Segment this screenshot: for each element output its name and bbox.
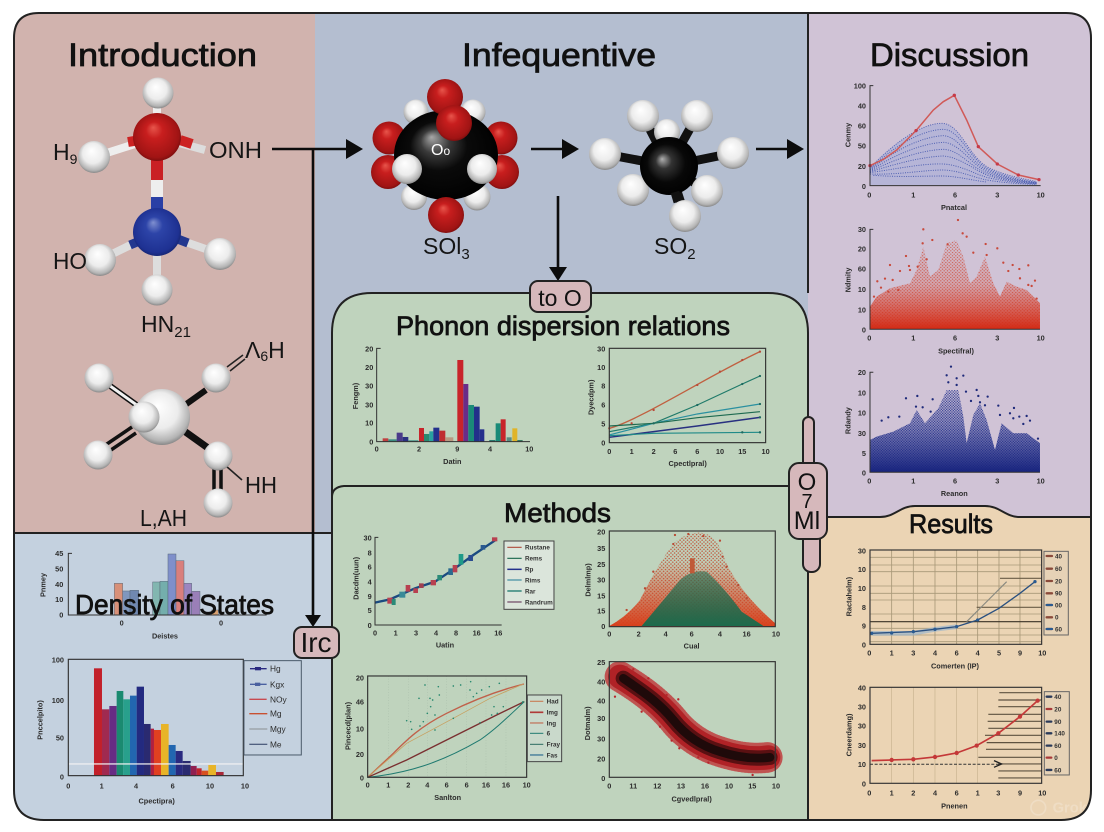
chart: methods line with legend: 6 (368, 563, 372, 572)
molecule labels: introduction: ONH (209, 137, 262, 163)
chart: small density histogram: 0 (120, 619, 124, 628)
legend: spectrum: Mgy (270, 724, 287, 734)
legend: results top: 0 (1055, 615, 1059, 622)
chart: density line with blue dotted curves: Pnatcal (941, 203, 967, 212)
chart: phonon bars: 4 (488, 444, 493, 453)
legend: results bottom: 140 (1054, 731, 1065, 738)
chart: small density histogram: 45 (55, 549, 63, 558)
molecule labels: introduction: 6 (260, 348, 268, 364)
chart: red growth curve: 2 (911, 788, 915, 797)
chart: red scatter intensity: 60 (858, 265, 866, 274)
legend: results top: 60 (1055, 566, 1062, 573)
molecule: white ball and stick (84, 355, 245, 518)
chart: methods line with legend: 5 (368, 606, 372, 615)
legend: methods multi-line: Fas (547, 752, 558, 759)
chart: methods red and green mound: Cual (684, 641, 700, 650)
legend: results bottom: 40 (1054, 694, 1062, 701)
chart: red scatter intensity (844, 220, 1045, 355)
chart: blue scatter intensity: 20 (858, 368, 866, 377)
chart: methods red and green mound: Delmlmp) (584, 563, 593, 597)
chart: conversion curve with grid: 10 (858, 565, 866, 574)
chart: red growth curve: 1 (976, 788, 980, 797)
chart: density line with blue dotted curves: 10 (1037, 190, 1045, 199)
chart: phonon lines: 5 (601, 420, 605, 429)
chart: small density histogram: 40 (55, 580, 63, 589)
chart: methods multi-line with scatter: 1 (386, 781, 390, 790)
chart: blue scatter intensity (844, 367, 1045, 498)
connector badge: O 7 Ml: Ml (794, 507, 820, 535)
chart: red growth curve: 1 (890, 788, 894, 797)
legend: methods line: Randrum (525, 599, 553, 606)
legend: results top: 40 (1055, 553, 1062, 560)
chart: blue scatter intensity: 10 (1037, 476, 1045, 485)
chart: phonon lines: 10 (716, 447, 724, 456)
heading: phonon dispersion relations: Phonon dispersion relations (396, 311, 730, 341)
arrow: SOI3 to SO2 (531, 139, 579, 159)
chart: blue scatter intensity: 3 (995, 476, 999, 485)
legend: results bottom: 60 (1054, 767, 1062, 774)
chart: phonon lines: Cpectlpral) (668, 459, 707, 468)
chart: blue scatter intensity: 6 (953, 476, 957, 485)
molecule labels: introduction (53, 137, 285, 531)
chart: methods red and green mound: 15 (597, 591, 605, 600)
chart: blue scatter intensity: 10 (858, 408, 866, 417)
chart: phonon bars (351, 344, 533, 466)
chart: methods dark red band: 13 (677, 782, 685, 791)
chart: phonon lines: 10 (762, 447, 770, 456)
molecule: SO2 black centre (589, 100, 749, 232)
legend: spectrum (244, 661, 301, 755)
chart: red growth curve: 6 (955, 788, 959, 797)
heading: results: Results (909, 509, 993, 539)
chart: red scatter intensity: 10 (858, 305, 866, 314)
chart: conversion curve with grid: 9 (862, 622, 866, 631)
chart: methods line with legend (351, 533, 554, 650)
watermark: Grok (1053, 801, 1088, 817)
chart: methods line with legend: Dacdm(uun) (351, 556, 360, 600)
chart: conversion curve with grid: 6 (955, 648, 959, 657)
chart: phonon lines: 30 (597, 344, 605, 353)
chart: methods multi-line with scatter: 6 (465, 781, 469, 790)
legend: results bottom: 0 (1054, 755, 1058, 762)
molecule labels: introduction: H (268, 337, 285, 363)
chart: methods dark red band: Cgvedlpral) (671, 795, 712, 804)
chart: methods dark red band: 30 (597, 714, 605, 723)
chart: coloured spectrum histogram: 50 (56, 734, 64, 743)
chart: blue scatter intensity: 10 (858, 388, 866, 397)
chart: phonon lines: 0 (601, 439, 605, 448)
chart: methods dark red band: 10 (725, 782, 733, 791)
chart: phonon lines: 2 (652, 447, 656, 456)
chart: methods red and green mound: 6 (690, 629, 694, 638)
legend: methods line: Rustane (525, 545, 550, 552)
chart: phonon lines: 1 (630, 447, 634, 456)
chart: coloured spectrum histogram: 10 (241, 782, 249, 791)
chart: methods dark red band: 15 (748, 782, 756, 791)
chart: phonon bars: 30 (365, 400, 373, 409)
chart: phonon lines: 15 (738, 447, 746, 456)
chart: small density histogram: 10 (55, 595, 63, 604)
chart: red scatter intensity: 30 (858, 225, 866, 234)
chart: methods multi-line with scatter: 10 (356, 724, 364, 733)
legend: results top: 20 (1055, 578, 1062, 585)
chart: blue scatter intensity: 0 (867, 476, 871, 485)
chart: small density histogram (38, 549, 267, 641)
molecule labels: introduction: L,AH (140, 505, 187, 531)
chart: phonon lines: 10 (597, 363, 605, 372)
molecule: SOI3 cluster (371, 79, 519, 233)
chart: phonon bars: 10 (365, 419, 373, 428)
chart: red growth curve: 30 (858, 722, 866, 731)
panel: results (808, 506, 1091, 820)
label: SO2: 2 (687, 246, 696, 263)
chart: methods line with legend: 0 (373, 628, 377, 637)
chart: methods multi-line with scatter: 20 (356, 750, 364, 759)
chart: phonon bars: 20 (365, 363, 373, 372)
legend: results bottom: 20 (1054, 706, 1062, 713)
chart: red scatter intensity: 10 (1037, 334, 1045, 343)
chart: small density histogram: 0 (59, 611, 63, 620)
legend: spectrum: Kgx (270, 679, 285, 689)
connector badge: O 7 Ml: 7 (801, 491, 813, 513)
chart: coloured spectrum histogram: 100 (52, 696, 64, 705)
chart: phonon bars: 0 (369, 438, 373, 447)
chart: methods red and green mound: 0 (607, 629, 611, 638)
chart: conversion curve with grid: 10 (858, 584, 866, 593)
legend: methods line (504, 541, 554, 609)
chart: methods line with legend: 9 (368, 592, 372, 601)
chart: methods multi-line with scatter: Sanlton (434, 793, 462, 802)
panel: phonon dispersion relations (331, 292, 809, 496)
chart: methods dark red band (583, 658, 780, 804)
chart: phonon bars: 0 (375, 444, 379, 453)
heading: introduction: Introduction (68, 37, 257, 73)
chart: methods multi-line with scatter: 16 (502, 781, 510, 790)
chart: density line with blue dotted curves: 60 (858, 121, 866, 130)
chart: conversion curve with grid: Ractahelm) (844, 576, 853, 616)
chart: methods dark red band: 0 (607, 782, 611, 791)
chart: red scatter intensity: 0 (867, 334, 871, 343)
connector badge: O 7 Ml: O (798, 469, 816, 496)
molecule: red and blue ball and stick (78, 78, 236, 306)
chart: red growth curve: Cneerdamg) (844, 713, 853, 756)
chart: methods line with legend: 3 (414, 628, 418, 637)
chart: red growth curve: 9 (1018, 788, 1022, 797)
watermark (1031, 800, 1088, 817)
legend: methods multi-line: 6 (547, 731, 551, 738)
chart: red scatter intensity: 3 (995, 334, 999, 343)
chart: phonon lines: 0 (607, 447, 611, 456)
chart: red growth curve: 40 (858, 684, 866, 693)
chart: density line with blue dotted curves: 20 (858, 162, 866, 171)
molecule labels: introduction: HN (141, 311, 174, 337)
chart: conversion curve with grid: 8 (862, 603, 866, 612)
chart: methods red and green mound (584, 527, 780, 650)
chart: small density histogram: 0 (219, 619, 223, 628)
chart: coloured spectrum histogram (36, 656, 301, 805)
legend: methods multi-line: Had (547, 699, 559, 706)
chart: methods red and green mound: 35 (597, 544, 605, 553)
badge: Irc (294, 627, 339, 658)
chart: phonon bars: 10 (525, 444, 533, 453)
arrow: SO2 to discussion (756, 139, 804, 159)
chart: methods dark red band: 11 (629, 782, 637, 791)
chart: blue scatter intensity: Rdandy (844, 406, 853, 434)
chart: methods red and green mound: 0 (601, 622, 605, 631)
molecule labels: introduction: HH (245, 472, 277, 498)
chart: red scatter intensity: 10 (858, 285, 866, 294)
heading: methods: Methods (504, 498, 611, 528)
chart: methods multi-line with scatter: 0 (360, 774, 364, 783)
chart: conversion curve with grid: 0 (867, 648, 871, 657)
chart: density line with blue dotted curves: 0 (867, 190, 871, 199)
chart: phonon lines: 6 (695, 447, 699, 456)
arrow: introduction to infequentive with branch down (272, 139, 363, 627)
chart: conversion curve with grid: 1 (890, 648, 894, 657)
chart: methods line with legend: 8 (454, 628, 458, 637)
chart: methods red and green mound: 10 (772, 629, 780, 638)
legend: results bottom: 60 (1054, 743, 1062, 750)
chart: red scatter intensity: Spectifral) (938, 346, 974, 355)
chart: methods line with legend: 4 (434, 628, 439, 637)
chart: conversion curve with grid: 4 (976, 648, 981, 657)
chart: methods multi-line with scatter: 6 (445, 781, 449, 790)
molecule labels: introduction: 9 (70, 151, 78, 167)
legend: results top: 60 (1055, 626, 1062, 633)
chart: conversion curve with grid: 30 (858, 546, 866, 555)
chart: methods dark red band: 40 (597, 677, 605, 686)
chart: conversion curve with grid: 10 (1038, 648, 1046, 657)
badge: to O: to O (538, 285, 582, 311)
chart: methods dark red band: 25 (597, 658, 605, 667)
legend: results bottom (1044, 692, 1069, 775)
label: SO2: SO (654, 233, 687, 259)
chart: methods multi-line with scatter: 4 (425, 781, 430, 790)
heading: discussion: Discussion (870, 37, 1029, 73)
legend: spectrum: NOy (270, 695, 287, 705)
chart: methods dark red band: 0 (601, 774, 605, 783)
badge: Irc: Irc (300, 627, 332, 658)
chart: coloured spectrum histogram: 6 (171, 782, 175, 791)
chart: methods dark red band: 16 (701, 782, 709, 791)
chart: red growth curve: 0 (867, 788, 871, 797)
chart: red scatter intensity: 0 (862, 326, 866, 335)
chart: methods line with legend: 16 (473, 628, 481, 637)
legend: methods line: Rims (525, 577, 541, 584)
chart: red growth curve: 3 (996, 788, 1000, 797)
chart: methods dark red band: Dotmalm) (583, 706, 592, 740)
chart: blue scatter intensity: 1 (911, 476, 915, 485)
chart: methods line with legend: 30 (364, 533, 372, 542)
chart: phonon lines: 6 (673, 447, 677, 456)
chart: coloured spectrum histogram: 0 (60, 773, 64, 782)
legend: methods line: Rems (525, 556, 543, 563)
chart: coloured spectrum histogram: Pnccelpito) (36, 700, 45, 740)
chart: red scatter intensity: Ndmity (844, 267, 853, 292)
chart: blue scatter intensity: Reanon (941, 489, 968, 498)
chart: methods red and green mound: 4 (664, 629, 669, 638)
chart: density line with blue dotted curves: 3 (995, 190, 999, 199)
chart: coloured spectrum histogram: 100 (52, 656, 64, 665)
chart: methods red and green mound: 4 (718, 629, 723, 638)
molecule labels: introduction: Λ (245, 337, 260, 363)
chart: phonon bars: 2 (417, 444, 421, 453)
panel: introduction (14, 13, 315, 533)
chart: methods line with legend: 16 (494, 628, 502, 637)
legend: spectrum: Me (270, 739, 282, 749)
chart: phonon lines: 6 (601, 400, 605, 409)
chart: red growth curve (844, 684, 1088, 817)
chart: methods red and green mound: 16 (743, 629, 751, 638)
panel: discussion (808, 13, 1091, 523)
chart: methods multi-line with scatter: 20 (356, 673, 364, 682)
chart: density line with blue dotted curves: 1 (911, 190, 915, 199)
chart: methods multi-line with scatter: Pincecd(plan) (344, 701, 353, 750)
panel: density of states (14, 533, 332, 820)
chart: conversion curve with grid: 0 (862, 641, 866, 650)
label: SOI3: 3 (461, 246, 470, 263)
chart: phonon bars: 30 (365, 382, 373, 391)
molecule labels: introduction: 21 (174, 324, 191, 341)
legend: methods line: Rar (525, 588, 536, 595)
arrow: down to phonon (549, 196, 567, 281)
chart: methods dark red band: 20 (597, 755, 605, 764)
chart: phonon lines: Dyecdpm) (586, 379, 595, 415)
chart: methods red and green mound: 25 (597, 560, 605, 569)
legend: results top: 90 (1055, 591, 1062, 598)
molecule labels: introduction: H (53, 139, 70, 165)
label: SOI3: SOl (423, 233, 461, 259)
legend: results top (1044, 551, 1068, 635)
chart: red scatter intensity: 20 (858, 245, 866, 254)
chart: methods multi-line with scatter: 46 (356, 698, 364, 707)
chart: phonon bars: 20 (365, 344, 373, 353)
chart: conversion curve with grid: 3 (911, 648, 915, 657)
legend: spectrum: Mg (270, 709, 282, 719)
chart: methods line with legend: 8 (368, 549, 372, 558)
chart: density line with blue dotted curves: 50 (858, 142, 866, 151)
chart: red growth curve: 30 (858, 741, 866, 750)
chart: red growth curve: 30 (858, 702, 866, 711)
chart: phonon lines: 8 (601, 382, 605, 391)
legend: methods multi-line: Img (547, 710, 558, 717)
chart: coloured spectrum histogram: 1 (100, 782, 104, 791)
chart: methods line with legend: 1 (394, 628, 398, 637)
chart: methods dark red band: 40 (597, 696, 605, 705)
chart: red growth curve: 4 (933, 788, 938, 797)
chart: methods dark red band: 30 (597, 735, 605, 744)
chart: red growth curve: 0 (862, 780, 866, 789)
chart: coloured spectrum histogram: 10 (206, 782, 214, 791)
chart: blue scatter intensity: 0 (862, 468, 866, 477)
chart: methods red and green mound: 30 (597, 576, 605, 585)
chart: conversion curve with grid: Comerten (IP) (931, 662, 980, 671)
chart: methods multi-line with scatter: 10 (523, 781, 531, 790)
chart: blue scatter intensity: 5 (862, 449, 866, 458)
chart: conversion curve with grid: 5 (997, 648, 1001, 657)
panel: methods (333, 485, 788, 803)
chart: density line with blue dotted curves: Cenmy (844, 122, 853, 147)
molecule labels: introduction: HO (53, 248, 87, 274)
panel: infequentive (315, 13, 808, 543)
legend: methods multi-line: Ing (547, 720, 556, 727)
chart: methods dark red band: 12 (653, 782, 661, 791)
chart: red scatter intensity: 6 (953, 334, 957, 343)
chart: red growth curve: 10 (1038, 788, 1046, 797)
chart: blue scatter intensity: 30 (858, 429, 866, 438)
chart: methods red and green mound: 20 (597, 527, 605, 536)
legend: results top: 00 (1055, 602, 1062, 609)
chart: methods line with legend: 4 (368, 578, 373, 587)
chart: coloured spectrum histogram: Cpectipra) (139, 796, 175, 805)
chart: methods multi-line with scatter: 0 (366, 781, 370, 790)
chart: methods line with legend: Uatin (436, 641, 455, 650)
legend: methods multi-line (527, 695, 562, 762)
molecule: SOI3 cluster: Oo (431, 142, 450, 159)
chart: coloured spectrum histogram: 4 (134, 782, 139, 791)
chart: density line with blue dotted curves: 6 (953, 190, 957, 199)
legend: results bottom: 90 (1054, 719, 1062, 726)
chart: methods red and green mound: 2 (637, 629, 641, 638)
chart: phonon bars: Fengm) (351, 382, 360, 409)
chart: methods dark red band: 10 (772, 782, 780, 791)
chart: small density histogram: 50 (55, 565, 63, 574)
chart: conversion curve with grid: 4 (933, 648, 938, 657)
chart: phonon lines (586, 344, 770, 468)
heading: density of states: Density of States (75, 589, 274, 620)
chart: density line with blue dotted curves: 100 (854, 81, 866, 90)
legend: spectrum: Hg (270, 664, 281, 674)
legend: methods line: Rp (525, 567, 534, 574)
chart: methods multi-line with scatter: 16 (482, 781, 490, 790)
chart: density line with blue dotted curves: 40 (858, 101, 866, 110)
chart: conversion curve with grid (844, 546, 1068, 671)
chart: red growth curve: 10 (858, 760, 866, 769)
chart: phonon bars: Datin (443, 457, 462, 466)
chart: small density histogram: Pnmey (38, 572, 47, 597)
chart: methods multi-line with scatter (344, 673, 562, 802)
connector badge: O 7 Ml (789, 417, 827, 572)
legend: methods multi-line: Fray (547, 742, 560, 749)
chart: density line with blue dotted curves (844, 81, 1045, 212)
chart: density line with blue dotted curves: 0 (862, 182, 866, 191)
heading: infequentive: Infequentive (462, 37, 656, 73)
chart: methods red and green mound: 15 (597, 607, 605, 616)
badge: to O (530, 281, 591, 312)
chart: methods line with legend: 0 (368, 621, 372, 630)
chart: phonon bars: 9 (455, 444, 459, 453)
chart: small density histogram: Deistes (152, 632, 178, 641)
chart: conversion curve with grid: 9 (1018, 648, 1022, 657)
chart: coloured spectrum histogram: 0 (66, 782, 70, 791)
chart: methods multi-line with scatter: 2 (406, 781, 410, 790)
chart: red scatter intensity: 1 (911, 334, 915, 343)
chart: red growth curve: Pnenen (941, 802, 968, 811)
